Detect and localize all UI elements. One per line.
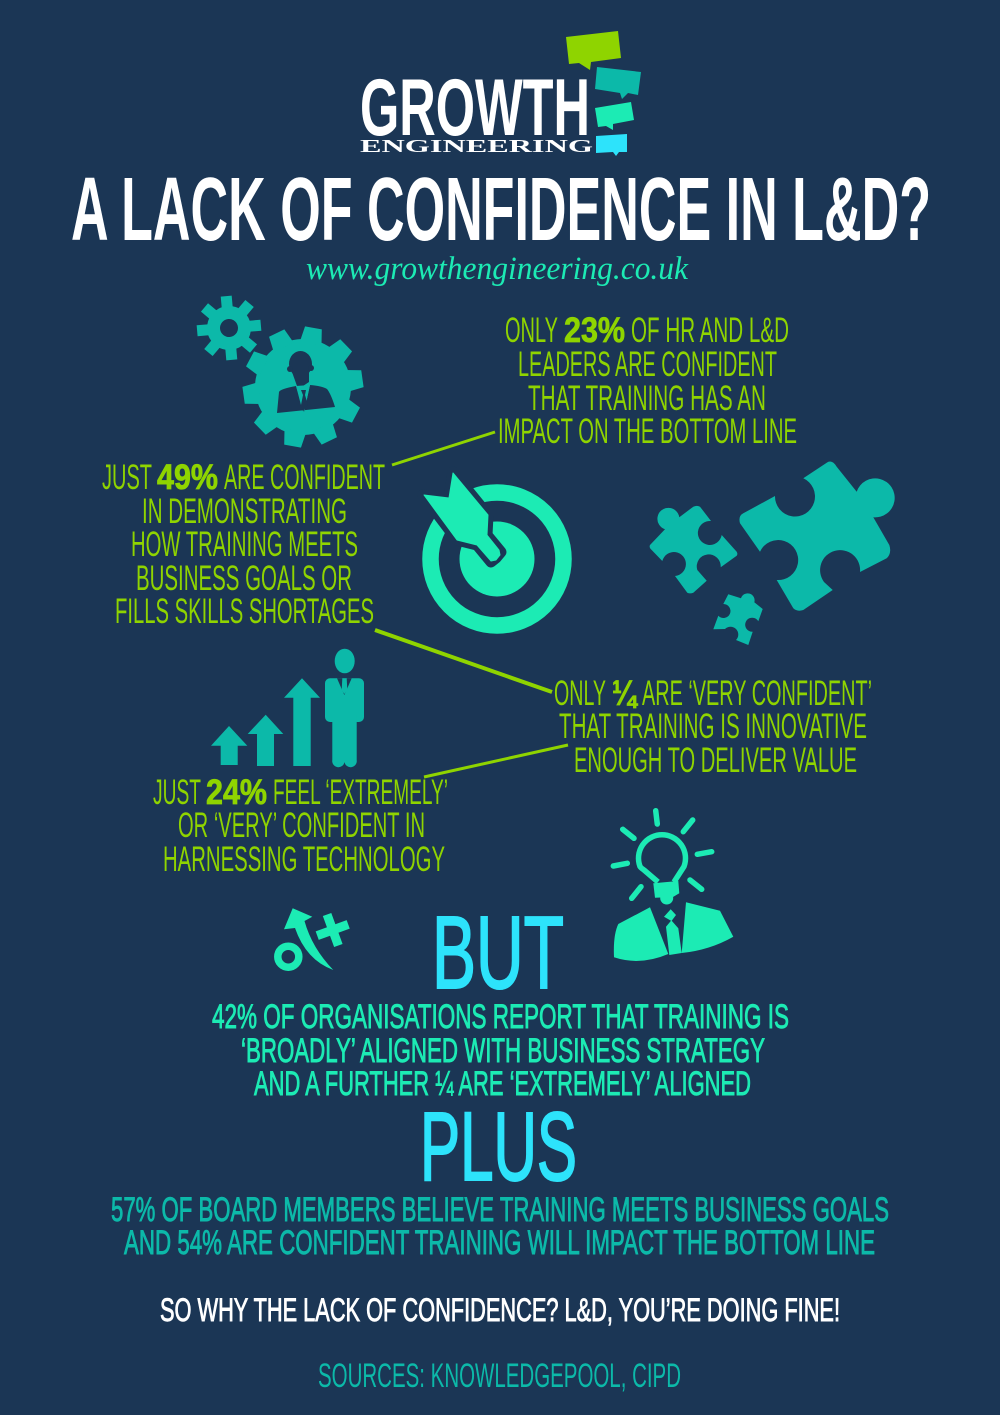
icon: strategy play marks bbox=[278, 908, 354, 970]
text: just 49% confident: 49% bbox=[157, 458, 218, 497]
connector line: 24% to one quarter bbox=[424, 745, 568, 777]
icon: puzzle pieces bbox=[650, 461, 895, 645]
light rays bbox=[613, 811, 712, 898]
small gear bbox=[194, 293, 264, 363]
text: just 24% harnessing technology bbox=[153, 773, 448, 879]
heading: plus: PLUS bbox=[420, 1092, 577, 1201]
text: just 24% harnessing technology: 24% bbox=[206, 773, 267, 812]
text: only 23% of leaders bbox=[498, 311, 797, 451]
text: 42% aligned bbox=[212, 998, 789, 1103]
website url: www.growthengineering.co.uk bbox=[306, 251, 689, 287]
large gear bbox=[233, 317, 373, 457]
logo wordmark bbox=[360, 63, 593, 156]
small puzzle piece bbox=[713, 593, 763, 645]
icon: lightbulb head businessman bbox=[613, 811, 733, 961]
text: just 24% harnessing technology: JUST bbox=[153, 773, 201, 812]
text: only 23% of leaders: ONLY bbox=[505, 311, 558, 350]
text: just 24% harnessing technology: FEEL ‘EXTREMELY’ bbox=[273, 773, 448, 812]
text: just 49% confident: HOW TRAINING MEETS bbox=[131, 525, 358, 564]
text: only 23% of leaders: IMPACT ON THE BOTTOM LINE bbox=[498, 412, 797, 451]
text: just 24% harnessing technology: HARNESSING TECHNOLOGY bbox=[163, 840, 445, 879]
logo speech bubbles bbox=[566, 31, 641, 156]
text: just 49% confident: IN DEMONSTRATING bbox=[142, 492, 347, 531]
text: just 49% confident: ARE CONFIDENT bbox=[224, 458, 385, 497]
text: only 23% of leaders: LEADERS ARE CONFIDENT bbox=[518, 345, 777, 384]
text: only 1/4 very confident bbox=[554, 674, 872, 780]
text: sources: SOURCES: KNOWLEDGEPOOL, CIPD bbox=[318, 1357, 681, 1395]
logo wordmark: ENGINEERING bbox=[360, 136, 593, 156]
text: only 23% of leaders: 23% bbox=[564, 311, 625, 350]
heading: but: BUT bbox=[432, 895, 564, 1010]
businessman silhouette bbox=[277, 351, 335, 413]
growth arrows bbox=[211, 678, 320, 766]
text: just 49% confident: BUSINESS GOALS OR bbox=[136, 559, 352, 598]
connector line: 49% to one quarter bbox=[375, 630, 552, 692]
text: only 23% of leaders: THAT TRAINING HAS AN bbox=[528, 379, 766, 418]
text: just 24% harnessing technology: OR ‘VERY’ CONFIDENT IN bbox=[178, 806, 425, 845]
logo wordmark: GROWTH bbox=[360, 63, 590, 153]
text: just 49% confident: FILLS SKILLS SHORTAGES bbox=[115, 592, 374, 631]
connector line: 49% to 23% bbox=[392, 432, 495, 465]
icon: gears with businessman bbox=[194, 293, 373, 457]
text: only 1/4 very confident: ¼ bbox=[612, 674, 638, 713]
logo: Growth Engineering bbox=[360, 31, 641, 156]
icon: target with arrow bbox=[423, 472, 564, 626]
text: only 1/4 very confident: ONLY bbox=[554, 674, 606, 713]
large puzzle piece bbox=[739, 461, 895, 611]
suit bbox=[614, 902, 733, 961]
light bulb bbox=[638, 835, 686, 904]
text: just 49% confident: JUST bbox=[102, 458, 152, 497]
text: only 23% of leaders: OF HR AND L&D bbox=[631, 311, 789, 350]
text: board members bbox=[111, 1191, 889, 1262]
medium puzzle piece bbox=[650, 506, 737, 593]
icon: growth arrows and businessman bbox=[211, 649, 364, 767]
standing businessman bbox=[325, 649, 364, 767]
text: just 49% confident bbox=[102, 458, 385, 631]
